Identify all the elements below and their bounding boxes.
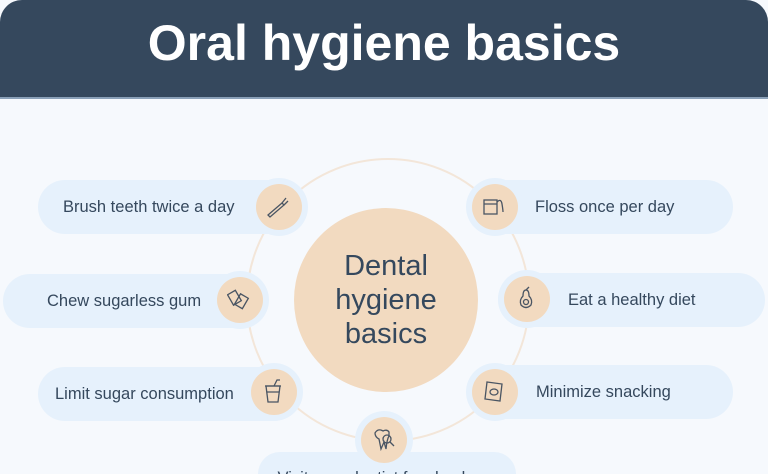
center circle: Dental [344,250,428,282]
icon: cup [251,369,297,415]
center circle [294,208,478,392]
pill: dentist [258,452,516,474]
center circle: basics [345,318,427,350]
ring [246,158,530,442]
pill: snacking: Minimize snacking [536,383,671,401]
icon: snack bag [472,369,518,415]
pill: brush: Brush teeth twice a day [63,198,235,216]
pill: sugar [38,367,300,421]
icon: tooth [361,417,407,463]
pill: sugar: Limit sugar consumption [55,385,234,403]
icon: toothbrush [256,184,302,230]
icon: avocado [504,276,550,322]
header: Oral hygiene basics [148,15,620,71]
pill: gum [3,274,262,328]
pill: floss [470,180,733,234]
pill: gum: Chew sugarless gum [47,292,201,310]
icon: gum [217,277,263,323]
icon: floss [472,184,518,230]
header [0,0,768,99]
pill: diet: Eat a healthy diet [568,291,696,309]
pill: floss: Floss once per day [535,198,674,216]
pill: snacking [470,365,733,419]
pill: diet [498,273,765,327]
center circle: hygiene [335,284,437,316]
pill: brush [38,180,300,234]
